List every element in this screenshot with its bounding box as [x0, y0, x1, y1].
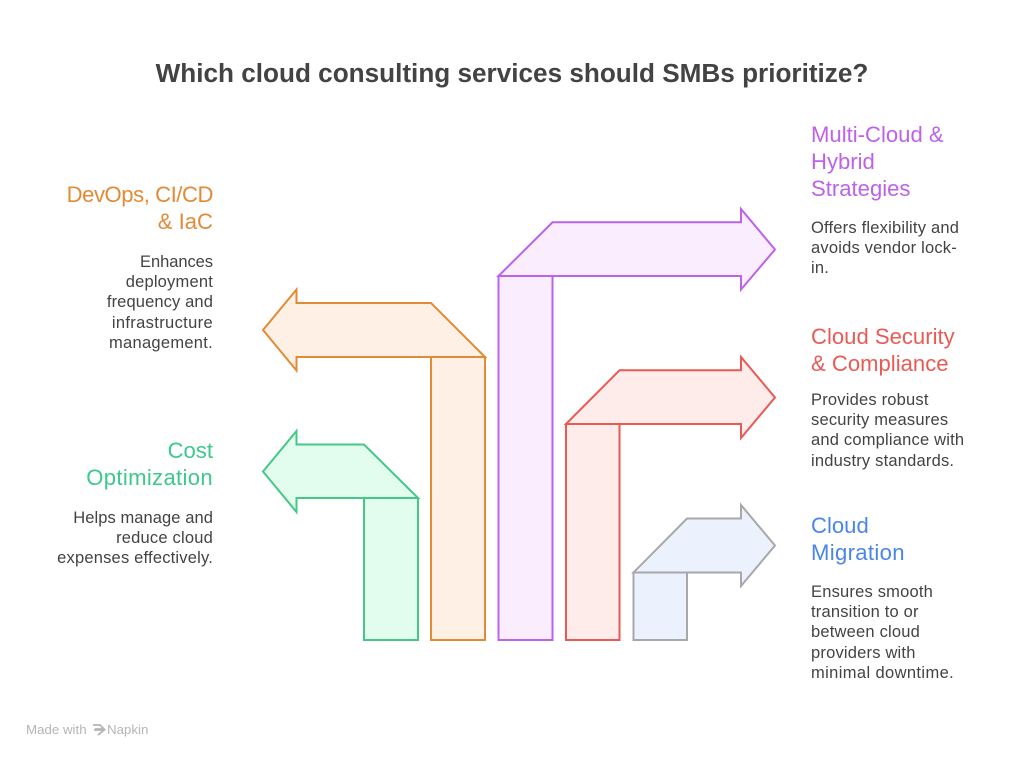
watermark — [26, 722, 148, 737]
heading: devops — [67, 182, 213, 234]
text: cloud migration — [811, 583, 954, 682]
heading: cloud migration — [811, 513, 905, 565]
arrow: devops — [263, 290, 485, 640]
watermark: Made with — [26, 722, 87, 737]
heading: cloud migration: Migration — [811, 540, 905, 565]
text: devops: deployment — [126, 273, 213, 291]
text: devops: infrastructure — [112, 314, 213, 332]
text: cloud security — [811, 391, 964, 470]
heading: cloud migration: Cloud — [811, 513, 869, 538]
heading: cloud security: & Compliance — [811, 351, 949, 376]
text: cost optimization — [57, 509, 213, 567]
watermark: Napkin — [107, 722, 148, 737]
text: multi-cloud: in. — [811, 259, 829, 277]
text: cost optimization: Helps manage and — [73, 509, 213, 527]
title: Which cloud consulting services should SMBs prioritize? — [156, 58, 868, 88]
heading: cost optimization: Optimization — [86, 465, 213, 490]
heading: devops: & IaC — [158, 209, 213, 234]
heading: cost optimization — [86, 438, 213, 490]
text: multi-cloud: avoids vendor lock- — [811, 239, 957, 257]
text: cost optimization: expenses effectively. — [57, 549, 213, 567]
text: cloud migration: minimal downtime. — [811, 664, 954, 682]
text: devops — [107, 253, 213, 352]
heading: cloud security: Cloud Security — [811, 324, 955, 349]
icon: napkin logo — [93, 724, 106, 736]
text: cloud migration: Ensures smooth — [811, 583, 933, 601]
text: multi-cloud: Offers flexibility and — [811, 219, 959, 237]
heading: cost optimization: Cost — [168, 438, 213, 463]
text: cloud migration: between cloud — [811, 623, 920, 641]
arrow: cost optimization — [263, 431, 418, 640]
heading: cloud security — [811, 324, 955, 376]
heading: multi-cloud: Strategies — [811, 176, 910, 201]
heading: devops: DevOps, CI/CD — [67, 182, 213, 207]
heading: multi-cloud: Multi-Cloud & — [811, 122, 944, 147]
heading: multi-cloud — [811, 122, 944, 201]
text: cloud security: security measures — [811, 411, 948, 429]
arrow: multi-cloud — [498, 209, 775, 640]
arrow: cloud security — [566, 357, 775, 640]
text: multi-cloud — [811, 219, 959, 277]
text: cloud migration: transition to or — [811, 603, 919, 621]
text: cloud security: and compliance with — [811, 431, 964, 449]
text: cloud security: industry standards. — [811, 452, 954, 470]
text: cost optimization: reduce cloud — [116, 529, 213, 547]
heading: multi-cloud: Hybrid — [811, 149, 875, 174]
text: cloud migration: providers with — [811, 644, 916, 662]
text: devops: frequency and — [107, 293, 213, 311]
text: devops: management. — [109, 334, 213, 352]
text: cloud security: Provides robust — [811, 391, 929, 409]
text: devops: Enhances — [140, 253, 213, 271]
arrow: cloud migration — [634, 505, 775, 640]
